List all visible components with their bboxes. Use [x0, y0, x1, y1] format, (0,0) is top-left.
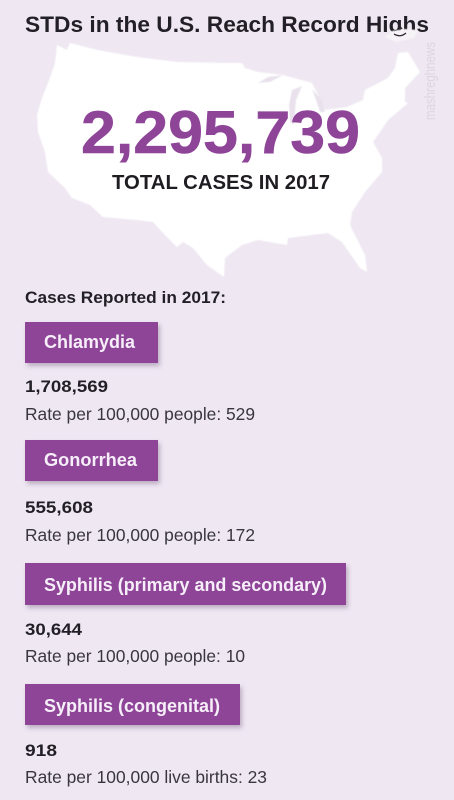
panel: syphilis primary and secondary	[25, 563, 346, 666]
section heading: Cases Reported in 2017:	[25, 288, 226, 307]
title: STDs in the U.S. Reach Record Highs	[25, 12, 429, 37]
chlamydia rate: Rate per 100,000 people: 529	[25, 404, 255, 424]
panel: syphilis congenital	[25, 684, 267, 787]
syphilis primary rate: Rate per 100,000 people: 10	[25, 646, 245, 666]
label: chlamydia	[25, 322, 158, 363]
label: gonorrhea	[25, 440, 158, 481]
gonorrhea rate: Rate per 100,000 people: 172	[25, 525, 255, 545]
total cases label: TOTAL CASES IN 2017	[112, 172, 330, 194]
total cases number: 2,295,739	[81, 99, 360, 166]
syphilis congenital rate: Rate per 100,000 live births: 23	[25, 767, 267, 787]
label: gonorrhea: Gonorrhea	[44, 450, 138, 470]
panel: chlamydia	[25, 322, 255, 424]
syphilis primary cases: 30,644	[25, 620, 83, 639]
label: chlamydia: Chlamydia	[44, 332, 136, 352]
label: syphilis congenital: Syphilis (congenital)	[44, 696, 220, 716]
watermark: mashreghnews	[422, 42, 439, 120]
chlamydia cases: 1,708,569	[25, 377, 108, 396]
gonorrhea cases: 555,608	[25, 498, 93, 517]
label: syphilis congenital	[25, 684, 240, 725]
label: syphilis primary and secondary	[25, 563, 346, 605]
panel: gonorrhea	[25, 440, 255, 545]
syphilis congenital cases: 918	[25, 741, 57, 760]
watermark	[385, 24, 439, 120]
map of the United States	[37, 43, 420, 277]
label: syphilis primary and secondary: Syphilis (primary and secondary)	[44, 575, 327, 595]
